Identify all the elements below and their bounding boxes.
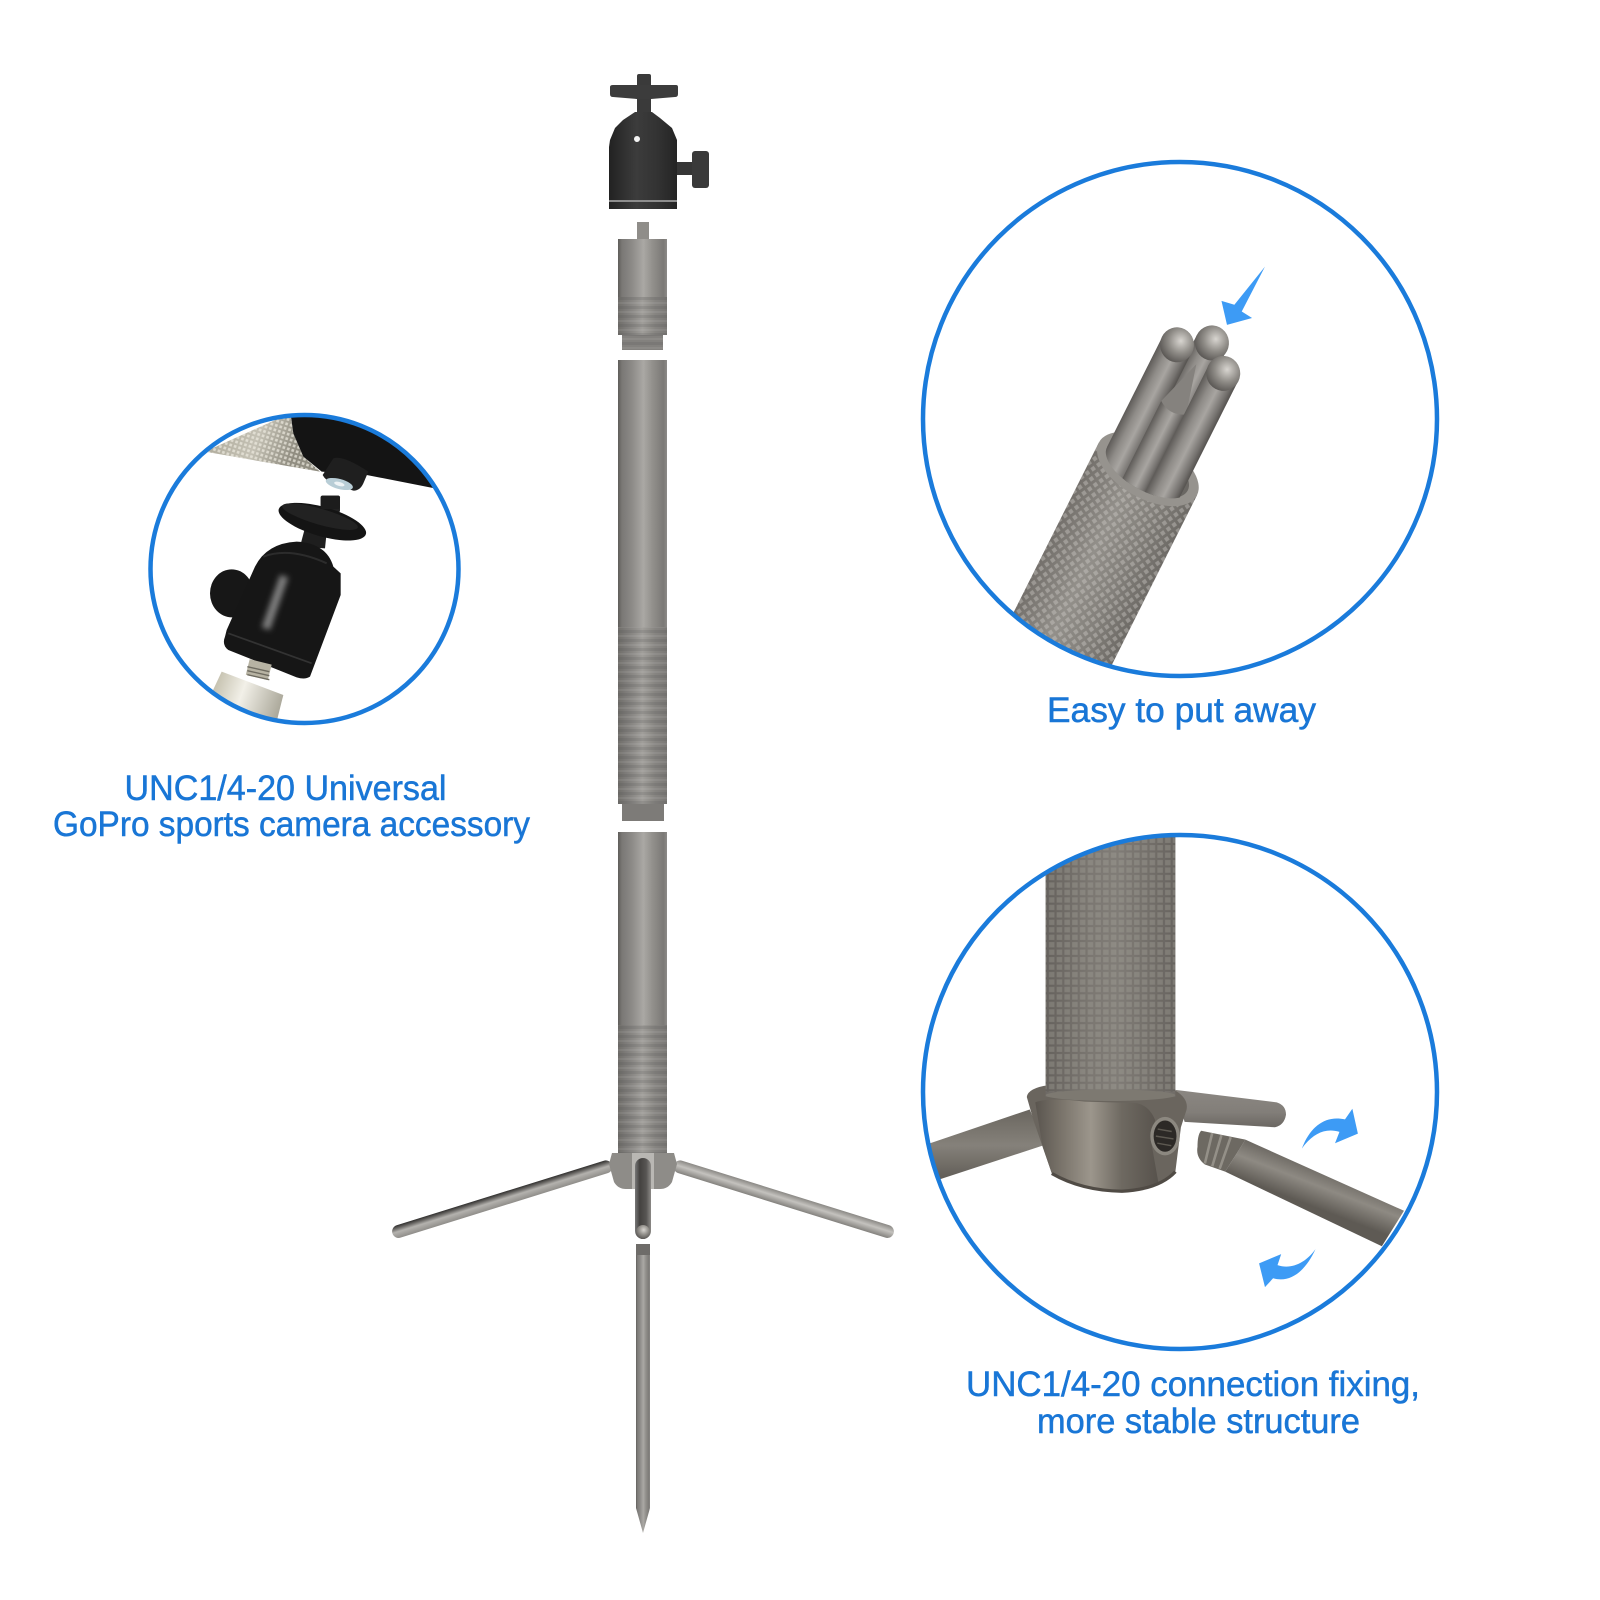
lower pole section [618, 832, 667, 1153]
detail image: stored legs inside tube [1014, 325, 1240, 664]
icon: press arrow [1221, 267, 1265, 325]
middle pole section [618, 360, 667, 821]
caption: connection fixing [966, 1365, 1420, 1441]
caption: universal accessory: UNC1/4-20 Universal [124, 769, 446, 808]
callout: ball head mount [53, 410, 530, 844]
callout: threaded connection [923, 822, 1437, 1441]
ball head [609, 74, 709, 209]
exploded tripod pole [390, 74, 896, 1533]
detached spike [636, 1244, 650, 1533]
detail circle outline [923, 162, 1437, 676]
callout: easy to put away [923, 162, 1437, 732]
icon: rotate arrow lower [1259, 1249, 1315, 1287]
detail circle outline [923, 835, 1437, 1349]
tripod legs and hub [390, 1153, 896, 1240]
detail image: hub and threaded leg [923, 822, 1404, 1246]
caption: universal accessory [53, 769, 530, 844]
detail circle outline [150, 415, 458, 723]
infographic: tripod pole with detail callouts [54, 74, 1440, 1533]
caption: universal accessory: GoPro sports camera accessory [53, 805, 530, 844]
icon: rotate arrow upper [1302, 1109, 1358, 1149]
top pole section [618, 222, 667, 350]
caption: easy to put away: Easy to put away [1047, 691, 1316, 730]
detail image: ball head [205, 410, 440, 722]
caption: connection fixing: more stable structure [1037, 1402, 1360, 1441]
caption: connection fixing: UNC1/4-20 connection fixing, [966, 1365, 1420, 1404]
